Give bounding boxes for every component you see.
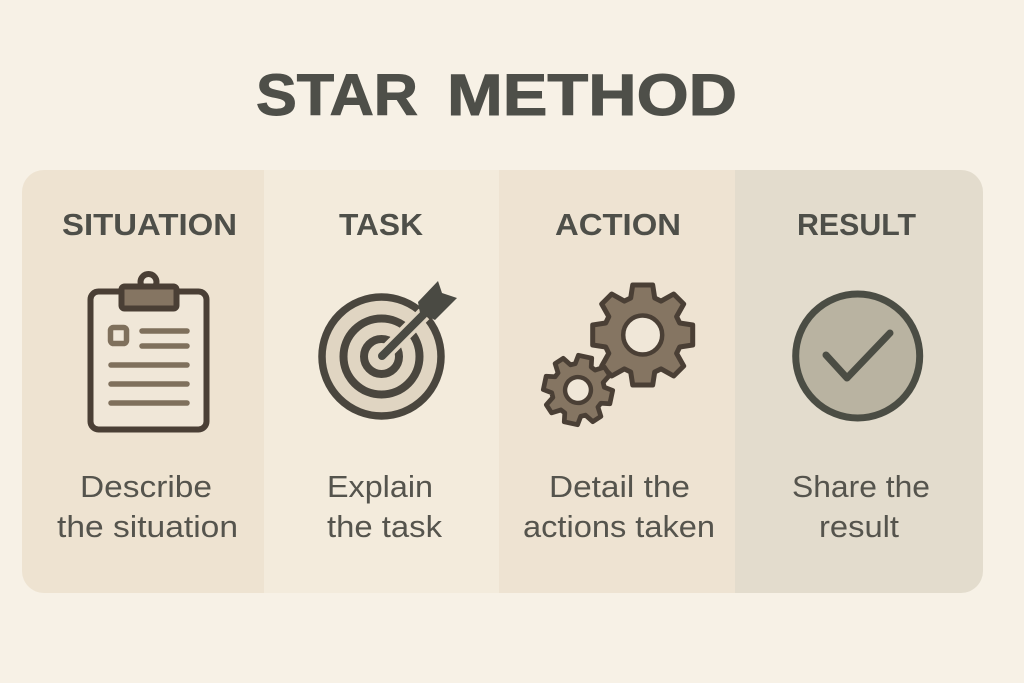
description: task: Explain (327, 469, 433, 504)
icon: check mark circle (796, 294, 920, 418)
title: STAR (256, 63, 418, 128)
panel: task (264, 170, 499, 593)
description: result: Share the (792, 469, 930, 504)
description: task: the task (327, 509, 443, 544)
description: result: result (819, 509, 899, 544)
heading: result: RESULT (797, 207, 916, 242)
description: action: Detail the (549, 469, 690, 504)
title: METHOD (447, 63, 737, 128)
icon: target with arrow (322, 281, 457, 416)
description: situation: Describe (80, 469, 212, 504)
heading: action: ACTION (555, 207, 681, 242)
heading: task: TASK (339, 207, 424, 242)
panel: situation (22, 170, 264, 593)
icon: gears (538, 285, 693, 430)
description: situation: the situation (57, 509, 238, 544)
icon: clipboard (90, 274, 206, 430)
panel: result (735, 170, 983, 593)
panel: action (499, 170, 735, 593)
heading: situation: SITUATION (62, 207, 237, 242)
description: action: actions taken (523, 509, 715, 544)
